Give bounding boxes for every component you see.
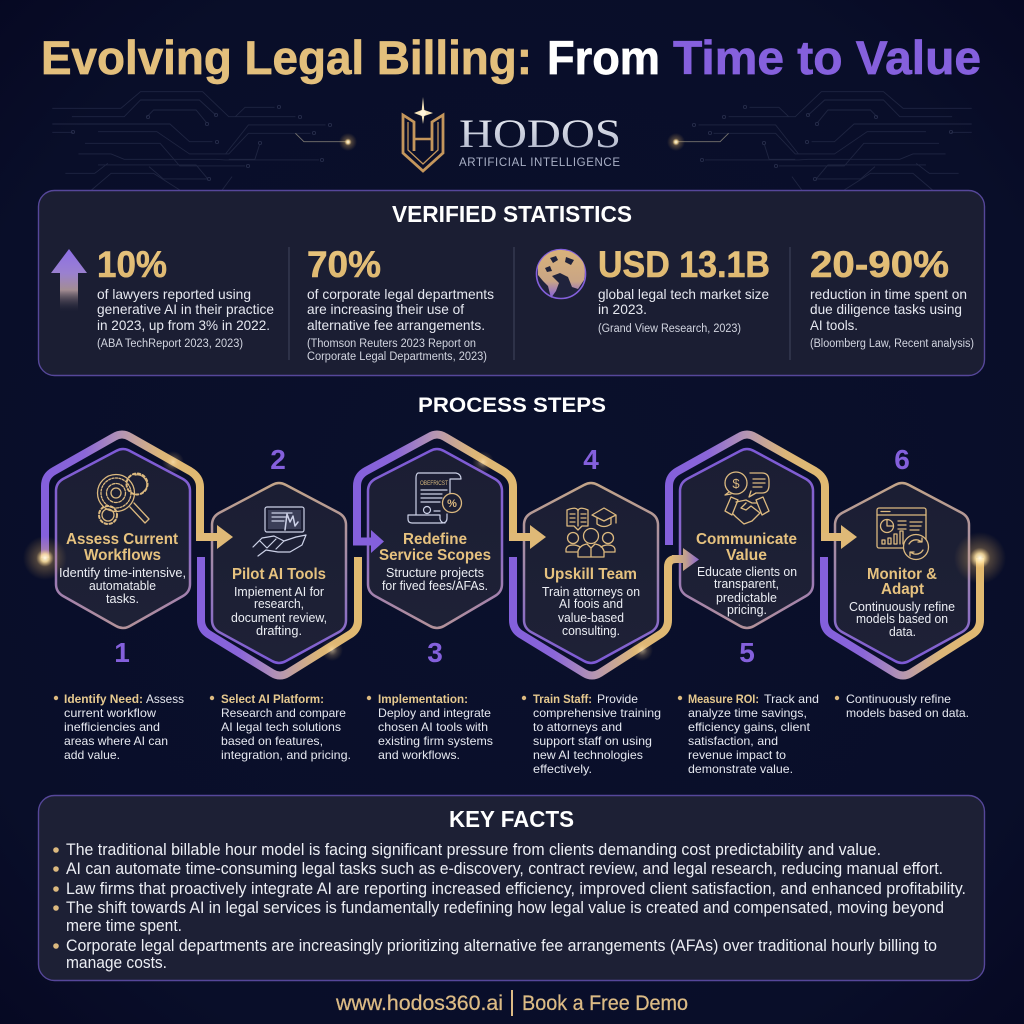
hexagon (835, 483, 969, 663)
step detail 2: integration, and pricing. (221, 748, 351, 762)
stat: 10%: of lawyers reported using (97, 286, 251, 302)
wordmark: HODOS (459, 111, 621, 156)
step detail 5: demonstrate value. (688, 762, 793, 776)
title: Evolving Legal Billing: (41, 31, 532, 84)
step detail 3: existing firm systems (378, 734, 493, 748)
step 5 (669, 434, 825, 668)
step detail 4: comprehensive training (533, 706, 661, 720)
icon: contract document: % (447, 498, 457, 510)
step detail 3: Deploy and integrate (378, 706, 491, 720)
stat: 70%: Corporate Legal Departments, 2023) (307, 351, 487, 363)
track (45, 434, 200, 558)
icon: shield (403, 115, 443, 171)
footer call to action: Book a Free Demo (522, 992, 688, 1015)
title (41, 31, 981, 84)
stat: 10%: generative AI in their practice (97, 301, 274, 317)
step detail 6: Continuously refine (846, 692, 951, 706)
heading: key facts: KEY FACTS (449, 806, 574, 832)
step detail 3: chosen AI tools with (378, 720, 488, 734)
circuit glow right (667, 133, 685, 151)
arrow: step 3 to 4 (509, 525, 546, 549)
step 6: data. (889, 624, 916, 639)
track (513, 557, 676, 676)
step detail 5 (678, 692, 819, 776)
logo (403, 97, 621, 171)
arrow: step 4 to 5 (672, 548, 699, 571)
hexagon (368, 449, 502, 628)
stat: 20-90%: due diligence tasks using (810, 301, 962, 317)
fact bullets: Law firms that proactively integrate AI are reporting increased efficiency, improved client satisfaction, and enhanced profitability. (66, 880, 966, 898)
stat: 20-90%: AI tools. (810, 317, 858, 333)
icon: up arrow (51, 249, 87, 312)
fact bullets: mere time spent. (66, 917, 182, 935)
step text: Identify time-intensive, (59, 565, 186, 580)
arrow: step 2 to 3 (353, 530, 384, 553)
icon: payment talk and handshake (725, 472, 769, 524)
circuit decoration left (52, 92, 346, 190)
step detail 1: areas where AI can (64, 734, 168, 748)
step title: Upskill Team (544, 566, 637, 583)
stat: 20-90%: 20-90% (810, 244, 949, 285)
icon: star (414, 97, 433, 124)
step detail 1: add value. (64, 748, 120, 762)
step detail 5: analyze time savings, (688, 706, 807, 720)
fact bullets (53, 841, 966, 972)
step detail 4: to attorneys and (533, 720, 622, 734)
step text: Structure projects (386, 565, 484, 580)
stat: USD 13.1B: (Grand View Research, 2023) (598, 323, 741, 335)
title: From (547, 31, 660, 84)
arrow: step 5 to 6 (821, 525, 857, 549)
stat: 20-90%: (Bloomberg Law, Recent analysis) (810, 338, 974, 350)
step detail 3: and workflows. (378, 748, 460, 762)
step detail 5: Measure ROI: (688, 692, 759, 706)
step detail 1: Assess (146, 692, 184, 706)
step 2: research, (254, 596, 304, 611)
step detail 4: support staff on using (533, 734, 652, 748)
step detail 6: models based on data. (846, 706, 969, 720)
step title: Communicate (696, 531, 797, 548)
icon: magnifier and gears (98, 474, 149, 524)
step 1 (45, 434, 200, 668)
step detail 4: effectively. (533, 762, 592, 776)
stat: 10%: (ABA TechReport 2023, 2023) (97, 338, 243, 350)
stat: 20-90% (810, 244, 974, 350)
title: Time to Value (673, 31, 981, 84)
stat: USD 13.1B: global legal tech market size (598, 286, 769, 302)
stat: USD 13.1B: USD 13.1B (598, 244, 770, 285)
step 5: Value (726, 547, 767, 564)
stat: 70%: 70% (307, 244, 381, 285)
icon: contract document: OBEFRICST (420, 481, 448, 487)
step 6: models based on (856, 611, 948, 626)
icon: payment talk and handshake: $ (732, 476, 740, 491)
icon: tablet and robotic hand (253, 507, 306, 556)
circuit decoration right (678, 92, 972, 190)
step detail 1: current workflow (64, 706, 156, 720)
step 5: predictable (716, 590, 777, 605)
track (201, 557, 358, 676)
step 4 (513, 444, 676, 676)
step text: Educate clients on (697, 564, 797, 579)
heading: process steps: PROCESS STEPS (418, 394, 606, 417)
fact bullets: The shift towards AI in legal services is fundamentally redefining how legal value is created and compensated, moving beyond (66, 899, 944, 917)
track (357, 434, 513, 545)
step title: Redefine (403, 531, 467, 548)
step detail 6 (835, 692, 969, 720)
number: 2 (270, 444, 286, 475)
step 3 (357, 434, 513, 668)
step 1: Workflows (84, 547, 161, 564)
hexagon (680, 449, 813, 628)
step title: Monitor & (867, 566, 937, 583)
number: 4 (583, 444, 599, 475)
step detail 2: Research and compare (221, 706, 346, 720)
step detail 2: based on features, (221, 734, 323, 748)
circuit glow left (339, 133, 357, 151)
track (824, 557, 980, 676)
arrow: step 1 to 2 (196, 525, 233, 549)
number: 5 (739, 637, 755, 668)
hexagon (524, 483, 658, 663)
step title: Assess Current (66, 531, 179, 548)
stat: 70%: of corporate legal departments (307, 286, 494, 302)
step detail 1: Identify Need: (64, 692, 143, 706)
step detail 2: AI legal tech solutions (221, 720, 341, 734)
hexagon (212, 483, 346, 663)
stat: 70%: are increasing their use of (307, 301, 464, 317)
step 2 (201, 444, 358, 676)
step detail 4: Train Staff: (533, 692, 592, 706)
step title: Pilot AI Tools (232, 566, 326, 583)
step detail 1: inefficiencies and (64, 720, 160, 734)
icon: dashboard and sync (877, 508, 928, 560)
step detail 4: new AI technologies (533, 748, 643, 762)
glow accents (23, 451, 1006, 661)
step detail 1 (54, 692, 184, 762)
step detail 5: Track and (764, 692, 819, 706)
step text: Continuously refine (849, 599, 955, 614)
hexagon (56, 449, 190, 628)
icon: globe (536, 250, 586, 298)
footer call to action (335, 990, 688, 1016)
stat: 70% (307, 244, 494, 363)
stat: 10% (51, 244, 274, 350)
panel: verified statistics (38, 190, 984, 376)
step 4: consulting. (562, 623, 620, 638)
step detail 2 (210, 692, 351, 762)
step 5: pricing. (727, 602, 767, 617)
step detail 3 (367, 692, 493, 762)
step 4: value-based (558, 610, 624, 625)
fact bullets: manage costs. (66, 954, 167, 972)
icon: contract document (408, 473, 462, 523)
stat: 10%: 10% (97, 244, 167, 285)
stat: 70%: alternative fee arrangements. (307, 317, 485, 333)
number: 6 (894, 444, 910, 475)
number: 1 (114, 637, 130, 668)
number: 3 (427, 637, 443, 668)
step 3: for fived fees/AFAs. (382, 578, 488, 593)
stat: 70%: (Thomson Reuters 2023 Report on (307, 338, 476, 350)
step detail 5: revenue impact to (688, 748, 786, 762)
step 2: document review, (231, 610, 327, 625)
step 4: AI foois and (559, 596, 623, 611)
step 2: drafting. (256, 623, 302, 638)
step 5: transparent, (714, 576, 779, 591)
icon: team with book and graduation cap (566, 508, 616, 557)
stat: USD 13.1B: in 2023. (598, 301, 647, 317)
stat: 10%: in 2023, up from 3% in 2022. (97, 317, 270, 333)
step 6: Adapt (881, 581, 925, 598)
step 1: automatable (89, 578, 156, 593)
fact bullets: The traditional billable hour model is facing significant pressure from clients demanding cost predictability and value. (66, 841, 881, 859)
step text: Train attorneys on (542, 584, 640, 599)
step detail 5: satisfaction, and (688, 734, 778, 748)
step 6 (824, 444, 980, 676)
step detail 5: efficiency gains, client (688, 720, 811, 734)
step text: Impiement AI for (234, 584, 325, 599)
step detail 2: Select AI Platform: (221, 692, 324, 706)
step 1: tasks. (106, 591, 139, 606)
panel: key facts (38, 796, 984, 980)
step detail 4 (522, 692, 661, 776)
step detail 4: Provide (597, 692, 638, 706)
footer call to action: www.hodos360.ai (335, 992, 503, 1015)
step 3: Service Scopes (379, 547, 491, 564)
stat: 20-90%: reduction in time spent on (810, 286, 967, 302)
heading: verified statistics: VERIFIED STATISTICS (392, 201, 632, 227)
fact bullets: Corporate legal departments are increasingly prioritizing alternative fee arrangements (AFAs) over traditional hourly billing to (66, 937, 937, 955)
stat: USD 13.1B (536, 244, 770, 335)
step detail 3: Implementation: (378, 692, 468, 706)
track (669, 434, 825, 545)
tagline: ARTIFICIAL INTELLIGENCE (459, 157, 620, 169)
fact bullets: AI can automate time-consuming legal tasks such as e-discovery, contract review, and legal research, reducing manual effort. (66, 860, 943, 878)
